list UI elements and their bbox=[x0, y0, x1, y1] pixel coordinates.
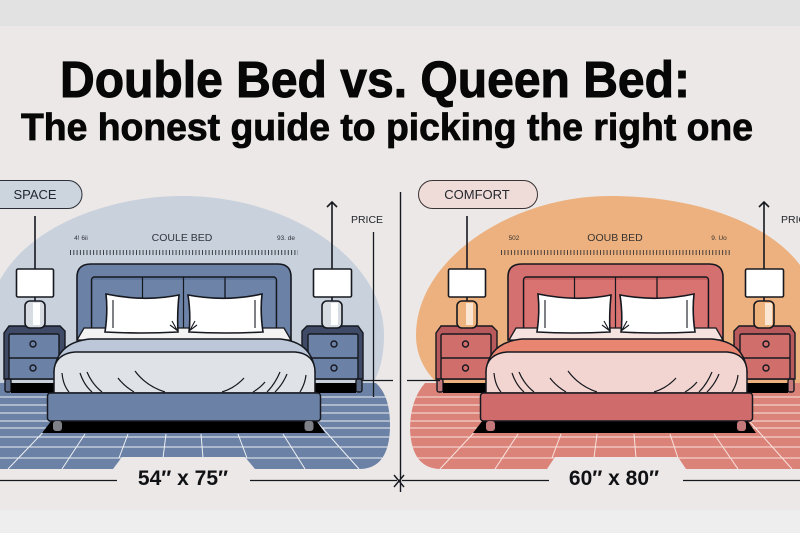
width scale labels: COULE BED bbox=[152, 232, 213, 244]
width scale labels bbox=[501, 232, 731, 252]
base bbox=[48, 393, 320, 421]
duvet folds bbox=[494, 371, 738, 392]
shadow bbox=[443, 383, 788, 433]
blanket bbox=[54, 339, 315, 372]
headboard bbox=[508, 264, 723, 340]
base bbox=[480, 393, 752, 421]
width scale labels: 502 bbox=[509, 235, 520, 242]
duvet bbox=[54, 352, 315, 393]
price scale bbox=[362, 232, 393, 397]
title: Double Bed vs. Queen Bed: bbox=[60, 51, 690, 108]
pillows bbox=[105, 294, 179, 333]
blanket bbox=[486, 339, 747, 372]
center divider bbox=[394, 192, 404, 492]
width scale labels: OOUB BED bbox=[587, 232, 643, 244]
left lamp bbox=[16, 216, 54, 328]
sheet bbox=[77, 328, 291, 340]
dimension: double: 54″ x 75″ bbox=[138, 467, 228, 490]
legs bbox=[486, 421, 495, 431]
comfort pill bbox=[418, 180, 538, 208]
shadow bbox=[11, 383, 356, 433]
panel: double bed bbox=[0, 180, 397, 490]
queen bed bbox=[443, 264, 788, 433]
pillows bbox=[537, 294, 611, 333]
right lamp and price arrow bbox=[314, 202, 352, 328]
right nightstand bbox=[302, 326, 363, 392]
orange background blob bbox=[416, 196, 800, 383]
blue floor rug bbox=[0, 383, 392, 471]
legs bbox=[53, 421, 62, 431]
left nightstand bbox=[4, 326, 65, 392]
width scale labels: 93. de bbox=[277, 235, 295, 242]
dimension: queen: 60″ x 80″ bbox=[569, 467, 659, 490]
blue background blob bbox=[0, 196, 384, 383]
space pill bbox=[0, 180, 82, 208]
sheet bbox=[509, 328, 723, 340]
width scale labels bbox=[70, 232, 298, 252]
double bed bbox=[11, 264, 356, 433]
comfort pill: COMFORT bbox=[444, 187, 510, 202]
right nightstand bbox=[734, 326, 795, 392]
left nightstand bbox=[436, 326, 497, 392]
title: The honest guide to picking the right one bbox=[21, 107, 753, 149]
right lamp and price arrow bbox=[746, 202, 784, 328]
title bbox=[21, 51, 753, 149]
price scale bbox=[407, 380, 440, 382]
width scale labels: 9. Uo bbox=[711, 235, 727, 242]
coral floor rug bbox=[408, 383, 800, 471]
duvet folds bbox=[62, 371, 306, 392]
panel: queen bed bbox=[402, 180, 800, 490]
headboard bbox=[77, 264, 291, 340]
left lamp bbox=[448, 216, 486, 328]
price label: PRICE bbox=[351, 214, 383, 226]
duvet bbox=[486, 352, 747, 393]
width scale labels: 4! 6ii bbox=[74, 235, 88, 242]
space pill: SPACE bbox=[13, 187, 57, 202]
